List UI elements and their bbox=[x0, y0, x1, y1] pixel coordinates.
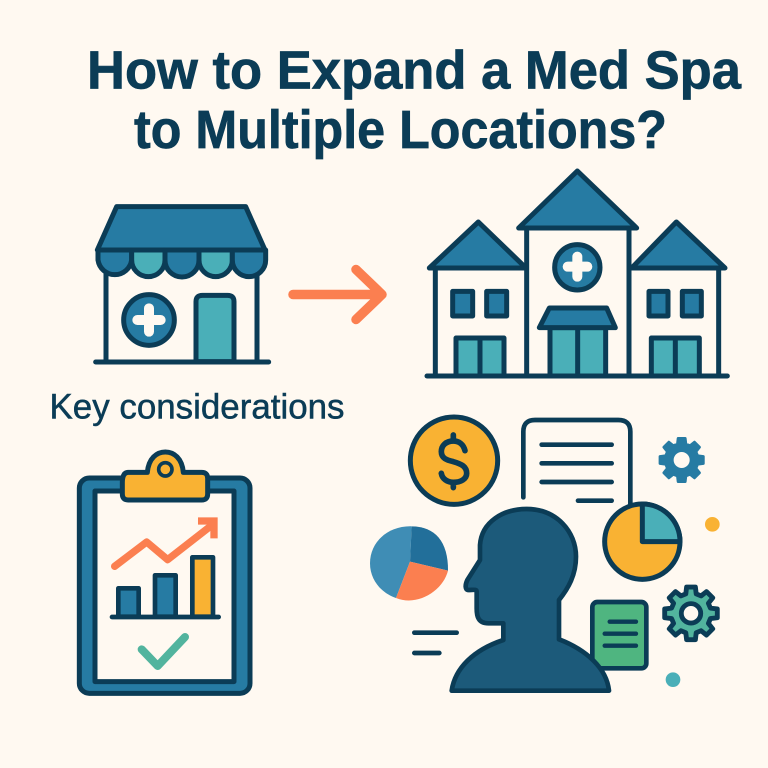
motion lines bbox=[414, 633, 457, 653]
right windows bbox=[649, 291, 701, 316]
awning scallops bbox=[98, 250, 266, 277]
storefront walls bbox=[106, 273, 257, 362]
green gear bbox=[665, 587, 717, 640]
check mark bbox=[142, 637, 185, 666]
illustration: planning cluster around person bbox=[370, 417, 720, 691]
subheading: Key considerations bbox=[50, 388, 344, 426]
clip bbox=[122, 452, 208, 500]
left roof bbox=[429, 222, 526, 268]
dollar coin bbox=[410, 417, 498, 504]
right door bbox=[651, 338, 699, 376]
medical cross badge bbox=[124, 295, 174, 345]
document bbox=[523, 420, 630, 505]
quarter pie chart bbox=[605, 504, 680, 579]
teal dot bbox=[666, 672, 680, 687]
icon: single med spa storefront bbox=[96, 207, 269, 362]
right roof bbox=[632, 222, 725, 268]
bar 2 bbox=[155, 575, 176, 617]
left door bbox=[456, 338, 504, 376]
arrow: expansion bbox=[293, 270, 382, 320]
clipboard board bbox=[79, 478, 250, 693]
awning roof bbox=[97, 207, 265, 250]
title bbox=[87, 40, 742, 160]
entrance canopy bbox=[539, 308, 615, 328]
title: to Multiple Locations? bbox=[134, 100, 667, 160]
multi-colour pie chart bbox=[370, 526, 448, 600]
door bbox=[196, 295, 234, 362]
ground line bbox=[427, 368, 727, 383]
medical cross badge bbox=[555, 245, 600, 290]
trend arrow bbox=[115, 521, 214, 566]
chart baseline bbox=[112, 610, 219, 624]
clip hole bbox=[159, 463, 172, 476]
paper bbox=[95, 491, 234, 682]
centre door bbox=[550, 328, 606, 376]
bar 3 bbox=[192, 557, 213, 617]
orange dot bbox=[705, 517, 720, 532]
ground line bbox=[96, 354, 269, 369]
centre roof bbox=[519, 171, 637, 228]
blue gear bbox=[660, 438, 703, 482]
green note bbox=[592, 602, 646, 668]
person silhouette bbox=[452, 509, 609, 691]
bar 1 bbox=[118, 588, 139, 617]
left windows bbox=[453, 291, 507, 316]
walls bbox=[435, 228, 719, 376]
icon: clipboard with chart bbox=[79, 452, 250, 693]
icon: multi-location buildings bbox=[427, 171, 727, 376]
title: How to Expand a Med Spa bbox=[87, 40, 742, 100]
